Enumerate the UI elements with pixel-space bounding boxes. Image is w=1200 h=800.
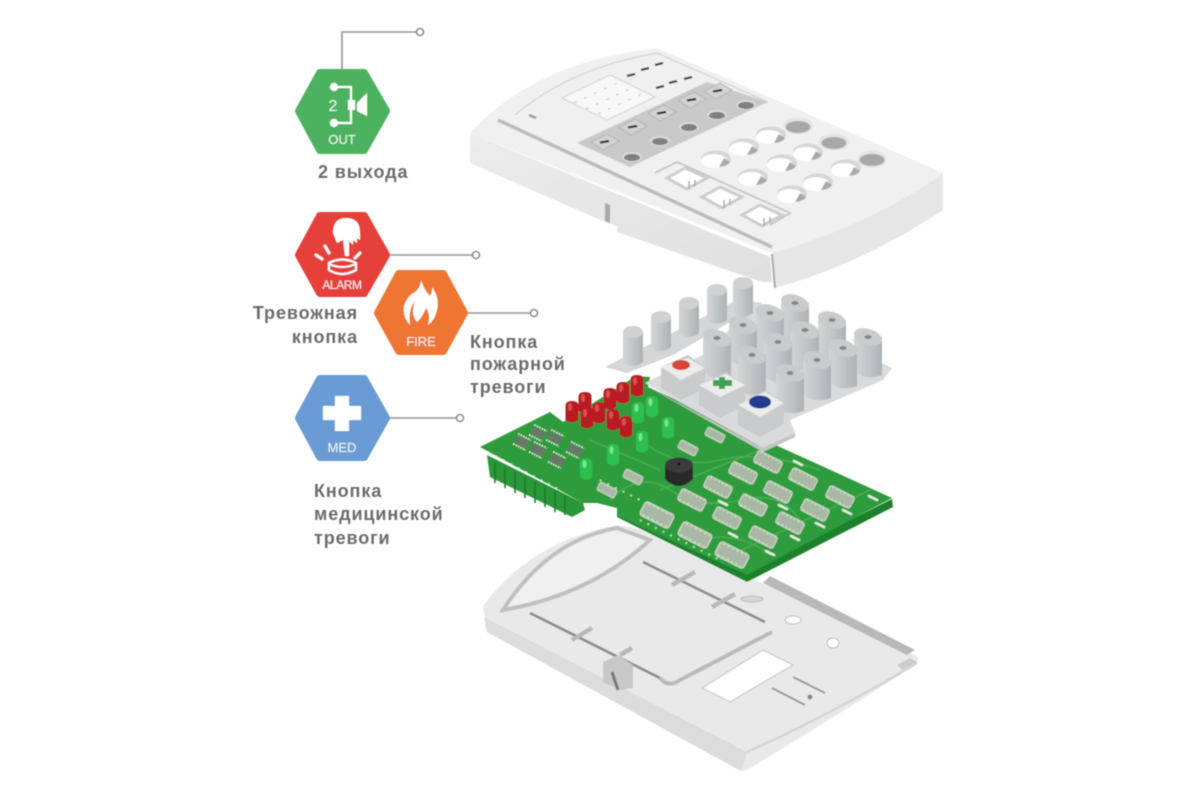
feature: 2 outputs <box>299 28 424 182</box>
exploded device illustration <box>470 48 943 771</box>
label: Тревожная <box>253 303 358 323</box>
front housing <box>470 48 943 288</box>
connector end <box>530 310 538 316</box>
label line 3: тревоги <box>314 528 391 548</box>
feature: fire button <box>378 274 566 397</box>
label: Кнопка <box>470 332 538 352</box>
circuit board <box>480 376 893 582</box>
connector end <box>416 28 424 36</box>
legend grid <box>562 75 655 120</box>
alarm keys <box>661 355 784 437</box>
connector line <box>390 417 456 419</box>
orange hexagon badge <box>378 274 464 351</box>
connector end <box>472 252 480 258</box>
icon: pressing hand <box>316 218 360 274</box>
label line 2: пожарной <box>470 354 566 374</box>
housing end wall <box>772 173 943 288</box>
icon: flame <box>404 280 438 325</box>
upper indicators <box>627 63 692 88</box>
icon: output speaker <box>331 84 367 126</box>
red hexagon badge <box>299 216 386 293</box>
feature: medical button <box>299 379 464 548</box>
tall button posts <box>623 277 753 366</box>
tag MED: MED <box>328 440 356 455</box>
buzzer <box>665 458 693 486</box>
green LEDs <box>580 396 674 480</box>
connector end <box>456 414 464 422</box>
icon: medical cross <box>323 396 361 431</box>
tag ALARM: ALARM <box>322 278 362 292</box>
housing front wall <box>470 133 772 282</box>
silicone keypad <box>605 277 892 452</box>
green hexagon badge <box>299 73 386 150</box>
logo mark <box>529 115 536 118</box>
feature: alarm button <box>253 216 480 347</box>
label: Кнопка <box>314 481 382 501</box>
key holes <box>701 118 887 203</box>
grey indicator panel <box>577 82 768 167</box>
board components <box>566 375 693 486</box>
alarm key windows <box>655 162 790 226</box>
connector line <box>342 32 416 69</box>
label line 2: кнопка <box>292 327 358 347</box>
label line 2: медицинской <box>314 504 444 524</box>
label: 2 выхода <box>318 162 408 182</box>
keypad sheet <box>605 300 892 452</box>
connector line <box>390 254 472 256</box>
red LEDs <box>566 375 644 438</box>
tag OUT: OUT <box>328 132 356 147</box>
number 2: 2 <box>329 98 338 115</box>
back cover <box>483 525 918 771</box>
connector line <box>468 312 530 314</box>
blue hexagon badge <box>299 379 386 457</box>
housing top face <box>470 48 943 253</box>
tag FIRE: FIRE <box>406 334 436 349</box>
number keys <box>701 291 884 413</box>
label line 3: тревоги <box>470 377 547 397</box>
